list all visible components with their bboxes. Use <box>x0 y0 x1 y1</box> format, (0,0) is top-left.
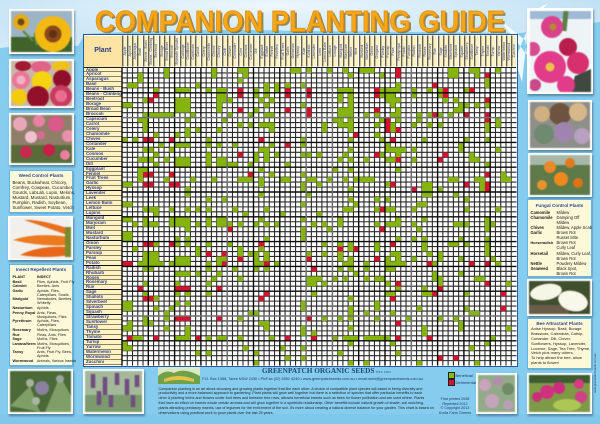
table: fungal control: Brown Rot <box>556 230 576 234</box>
column headers: Chilli <box>223 47 227 55</box>
panel: bee attractant plants <box>527 318 592 369</box>
table: fungal control: Mildew, Apple Scab <box>556 224 592 230</box>
photo: lavender flowers right <box>476 373 517 414</box>
introduction text <box>158 386 434 415</box>
column headers: Fruit Trees <box>281 43 285 60</box>
text: bee attractant list: Coriander, Dill, Clover, <box>531 336 571 341</box>
table: plant and insect: Catmint <box>12 284 27 288</box>
text: bee attractant list: Anise Hyssop, Basil, Borage <box>531 326 581 331</box>
introduction text: productivity and a more balanced approach to gardening. Plant plants will grow well together but there is a selection of species that offer particular benefits to each <box>158 391 422 395</box>
column headers: Roses <box>423 46 427 56</box>
column headers: Parsnip <box>386 45 390 57</box>
print credits: Kodla Farm Greens <box>439 411 471 415</box>
panel: weed control plants <box>9 170 73 213</box>
table: plant and insect: Sage <box>12 337 22 341</box>
column headers: Broccoli <box>170 45 174 57</box>
table: fungal control: Black Spot, <box>556 266 577 271</box>
table: plant and insect: Marigold <box>12 297 28 301</box>
column headers: Cosmos <box>244 45 248 58</box>
column headers: Capsicum <box>191 43 195 59</box>
table: fungal control <box>530 210 592 276</box>
column headers: Wormwood <box>507 42 511 60</box>
table: fungal control: Russet Mite <box>556 234 578 240</box>
column headers: Corn <box>239 47 243 55</box>
column headers: Chamomile <box>207 42 211 60</box>
column headers: Parsley <box>381 45 385 57</box>
photo: lavender <box>83 369 144 414</box>
print credits: © Copyright 2013 <box>441 406 469 410</box>
table: plant and insect: Fruit Fly <box>37 346 51 350</box>
column headers: Leek <box>318 47 322 55</box>
column headers: Pumpkin <box>407 44 411 58</box>
column headers: Marjoram <box>344 44 348 59</box>
column headers: Sunflower <box>470 43 474 59</box>
heading: greenpatch organic seeds: GREENPATCH ORGANIC SEEDS EST. 1993 <box>262 366 391 374</box>
table: fungal control: Brown Rot <box>556 240 576 245</box>
photo: pink flowers <box>527 373 592 414</box>
compatibility grid <box>121 68 516 366</box>
column headers: Celery <box>202 46 206 56</box>
contact details: P.O. Box 1388, Taree NSW 2430 • Ph/Fax (02) 6551 4240 • www.greenpatchseeds.com.au • email:seed@greenpatchseeds.com.au <box>202 376 423 380</box>
table: plant and insect: Rosemary <box>12 328 31 332</box>
heading: weed control: Weed Control Plants <box>19 173 63 178</box>
column headers: Kale <box>302 48 306 55</box>
plant header cell: Plant <box>94 47 111 54</box>
text: weed control list: Sunflower, Sweet Potato, Vetch <box>12 205 74 210</box>
column headers: Sage <box>439 47 443 55</box>
column headers: Asparagus <box>133 43 137 60</box>
table: fungal control: Brown Rot <box>556 271 576 276</box>
detrimental cells <box>122 70 506 358</box>
table: plant and insect: Whitefly <box>37 301 51 305</box>
column headers: Rosemary <box>428 43 432 59</box>
introduction text: other & planting herbs and flowers under fruit trees and between tree rows, attracts beneficial insects such as bees for flower pollination and are used where. Plants <box>158 396 424 400</box>
column headers: Feverfew <box>275 44 279 58</box>
column headers: Endive <box>265 46 269 57</box>
column headers: Garlic <box>286 47 290 56</box>
table: plant and insect: Nasturtium <box>12 306 33 310</box>
text: bee attractant list: Vetch plus many others. <box>531 350 574 355</box>
text: bee attractant list: Lucerne, Sage, Tea Tree, Thyme, <box>531 346 590 351</box>
panel: fungal control plants <box>527 199 592 277</box>
table: plant and insect: Aphids, Flies, <box>37 319 60 323</box>
table: fungal control: Mildew, Curly Leaf, <box>556 250 591 256</box>
column headers: Cauliflower <box>186 43 190 60</box>
column headers: Nasturtium <box>365 43 369 60</box>
legend: detrimental: Detrimental <box>456 380 476 384</box>
table: plant and insect: Aphids <box>37 354 49 358</box>
column headers: Radish <box>412 46 416 57</box>
column headers: Thyme <box>481 46 485 57</box>
column headers: Pennyroyal <box>396 42 400 60</box>
table: plant and insect <box>12 274 76 363</box>
column headers: Beans - Climbing <box>149 38 153 65</box>
table: plant and insect: Moths, Mosquitoes <box>37 328 69 332</box>
column headers: Apple <box>123 47 127 56</box>
beneficial cells <box>122 70 511 363</box>
photo: hollyhocks <box>527 8 593 94</box>
table: plant and insect: Garlic <box>12 288 23 292</box>
column headers: Cucumber <box>249 43 253 59</box>
column headers: Brussels Sprouts <box>175 38 179 64</box>
table: plant and insect: Nematodes, Beetles, <box>37 297 72 301</box>
print credits: First printed 2008 <box>441 397 469 401</box>
table: fungal control: Camomile <box>530 210 550 214</box>
table: plant and insect: Aphids <box>37 306 49 310</box>
text: bee attractant list: Sunflowers, Hyssop, Lavender, <box>531 341 586 346</box>
table: plant and insect: Moths, Mosquitoes, <box>37 342 70 346</box>
column headers: Spinach <box>454 45 458 58</box>
table: fungal control: Mildew <box>556 220 569 224</box>
table: fungal control: Chives <box>530 224 544 230</box>
table: plant and insect: INSECT <box>37 274 51 278</box>
table: fungal control: Chamomile <box>530 214 553 220</box>
text: weed control list: Gourds, LabLab, Lupin, Melons, <box>12 190 75 195</box>
table: fungal control: Brown Rot <box>556 256 576 260</box>
legend: detrimental <box>448 379 476 386</box>
table: plant and insect: Penny Royal <box>12 310 35 314</box>
column headers: Yarrow <box>497 46 501 57</box>
column headers: Tomato <box>486 46 490 57</box>
column headers: Lavender <box>312 44 316 59</box>
photo: sunflowers <box>9 9 74 54</box>
column headers: Mint <box>354 48 358 55</box>
photo: purple and orange flower <box>528 100 592 150</box>
column headers: Marigold <box>339 45 343 58</box>
heading: insect repellent: Insect Repellent Plants <box>16 267 66 272</box>
table: plant and insect: Beetles, Ants <box>37 284 59 288</box>
introduction text: that have an effect on insects exude certain aromas and will grow together in a symbiotic relationship. Other benefits include natural growth of shade, soil mulching, <box>158 401 424 405</box>
column headers: Eggplant <box>260 44 264 58</box>
legend <box>448 372 476 386</box>
table: plant and insect: Tansy <box>12 350 23 354</box>
website side text: www.greenpatchseeds.com.au <box>593 354 597 393</box>
table: plant and insect: Mosquitoes, Flies <box>37 315 67 319</box>
column headers: Chervil <box>212 46 216 57</box>
photo: white eggplant <box>527 279 592 316</box>
column headers: Mustard <box>360 45 364 58</box>
table: fungal control: Mildew <box>556 210 569 214</box>
column headers: Squash <box>460 45 464 57</box>
photo: borage flowers <box>8 369 73 414</box>
table: plant and insect: Basil <box>12 280 22 284</box>
column headers: Basil <box>138 47 142 55</box>
heading: bee attractant: Bee Attractant Plants <box>536 321 583 326</box>
introduction text: Companion planting is an art about choosing and growing plants together that like each other. A choice of compatible plant species will assist in being diversity and <box>158 386 422 390</box>
column headers: Potato <box>402 46 406 56</box>
column headers: Turnip <box>491 46 495 56</box>
table: fungal control: Seaweed <box>530 266 548 271</box>
row labels <box>84 68 122 365</box>
column headers: Strawberry <box>465 43 469 60</box>
column headers: Beetroot <box>154 45 158 58</box>
column headers: Borage <box>160 46 164 57</box>
table: plant and insect: Wormwood <box>12 359 33 363</box>
column headers: Broad Bean <box>165 42 169 60</box>
column headers: Zucchini <box>512 45 516 58</box>
photo: beetroot slices <box>9 59 74 108</box>
column headers: Peas <box>391 47 395 55</box>
heading: fungal control: Fungal Control Plants <box>536 202 583 208</box>
column headers: Silverbeet <box>449 43 453 59</box>
column headers: Carrot <box>196 46 200 56</box>
text: bee attractant list: To help attract the bee, allow <box>531 355 582 360</box>
column headers: Tansy <box>475 47 479 56</box>
text: weed control list: Comfrey, Cowpeas, Cucumber, <box>12 185 73 190</box>
print credits: Reprinted 2012 <box>442 402 468 406</box>
table: plant and insect: Aphids, Flies, <box>37 288 60 292</box>
text: weed control list: Beans, Buckwheat, Chicory, <box>12 180 67 185</box>
table: fungal control: Horsetail <box>530 250 548 256</box>
introduction text: plants attracting predatory insects, use of legumes for the enrichment of the soil. It's more about creating a natural diverse balance for your garden. This chart is based on <box>158 406 434 410</box>
text: weed control list <box>12 180 75 210</box>
column headers: Apricot <box>128 46 132 57</box>
column headers: Beans - Bush <box>144 41 148 62</box>
column headers: Lettuce <box>328 46 332 57</box>
column headers: Lemon Balm <box>323 41 327 61</box>
column headers: Oregano <box>375 44 379 58</box>
text: bee attractant list: plants to flower! <box>531 360 559 365</box>
table: plant and insect: Pyrethrum <box>12 319 32 323</box>
column headers: Kohlrabi <box>307 45 311 58</box>
text: weed control list: Mustard, Mustard, Nasturtium, <box>12 195 72 200</box>
table: fungal control: Damping Off <box>556 214 579 220</box>
panel: insect repellent plants <box>9 264 73 366</box>
column headers: Geranium <box>291 44 295 59</box>
table: plant and insect: Animals, Various Insects <box>37 359 76 363</box>
table: fungal control: Curly Leaf <box>556 245 575 250</box>
column headers: Lovage <box>333 46 337 57</box>
table: plant and insect: Caterpillars <box>37 323 56 327</box>
table: plant and insect: Caterpillars, Snails <box>37 293 69 297</box>
column headers: Chicory <box>217 45 221 57</box>
text: weed control list: Pumpkin, Radish, Soybean, <box>12 200 67 205</box>
column headers <box>122 36 516 68</box>
table: plant and insect: Rue <box>12 332 20 336</box>
text: bee attractant list: Brassicas, Calendula, Catnip, <box>531 331 583 336</box>
table: fungal control: Garlic <box>530 230 542 234</box>
text: bee attractant list <box>531 326 590 365</box>
table: plant and insect: Fleas, Ants, Flies <box>37 332 66 336</box>
column headers: Chives <box>228 46 232 57</box>
column headers: Watermelon <box>502 42 506 61</box>
table: fungal control: Powdery Mildew <box>556 261 586 266</box>
table: fungal control: Nettle <box>530 261 542 266</box>
column headers: Fennel <box>270 46 274 57</box>
table: fungal control: Horseradish <box>530 240 553 245</box>
table: plant and insect: Moths, Flies <box>37 337 57 341</box>
column headers: Cabbage <box>181 44 185 58</box>
table: plant and insect: PLANT <box>12 274 25 278</box>
table: plant and insect: Ants, Fruit Fly, Bees, <box>37 350 72 354</box>
print credits <box>439 397 471 415</box>
column headers: Onion <box>370 47 374 56</box>
column headers: Shallots <box>444 45 448 57</box>
legend: beneficial: Beneficial <box>456 372 473 378</box>
column headers: Rue <box>433 48 437 54</box>
introduction text: observations using practical work to grow plants over the last 25 years. <box>158 411 274 415</box>
column headers: Rhubarb <box>418 45 422 58</box>
legend: beneficial <box>448 372 473 379</box>
logo <box>158 367 200 384</box>
photo: carrots <box>8 216 73 260</box>
column headers: Hyssop <box>296 45 300 57</box>
column headers: Coriander <box>233 44 237 59</box>
photo: cosmos flowers <box>9 113 74 165</box>
plant header cell <box>84 36 122 68</box>
table: plant and insect: Ants, Fleas, <box>37 310 57 314</box>
column headers: Dill <box>254 49 258 54</box>
panel: companion chart <box>83 34 518 366</box>
column headers: Melon <box>349 46 353 56</box>
table: plant and insect: Flies, Aphids, Fruit Fly <box>37 280 74 284</box>
photo: orange fruit <box>528 153 592 197</box>
table: plant and insect: Lantana/Neem <box>12 342 36 346</box>
